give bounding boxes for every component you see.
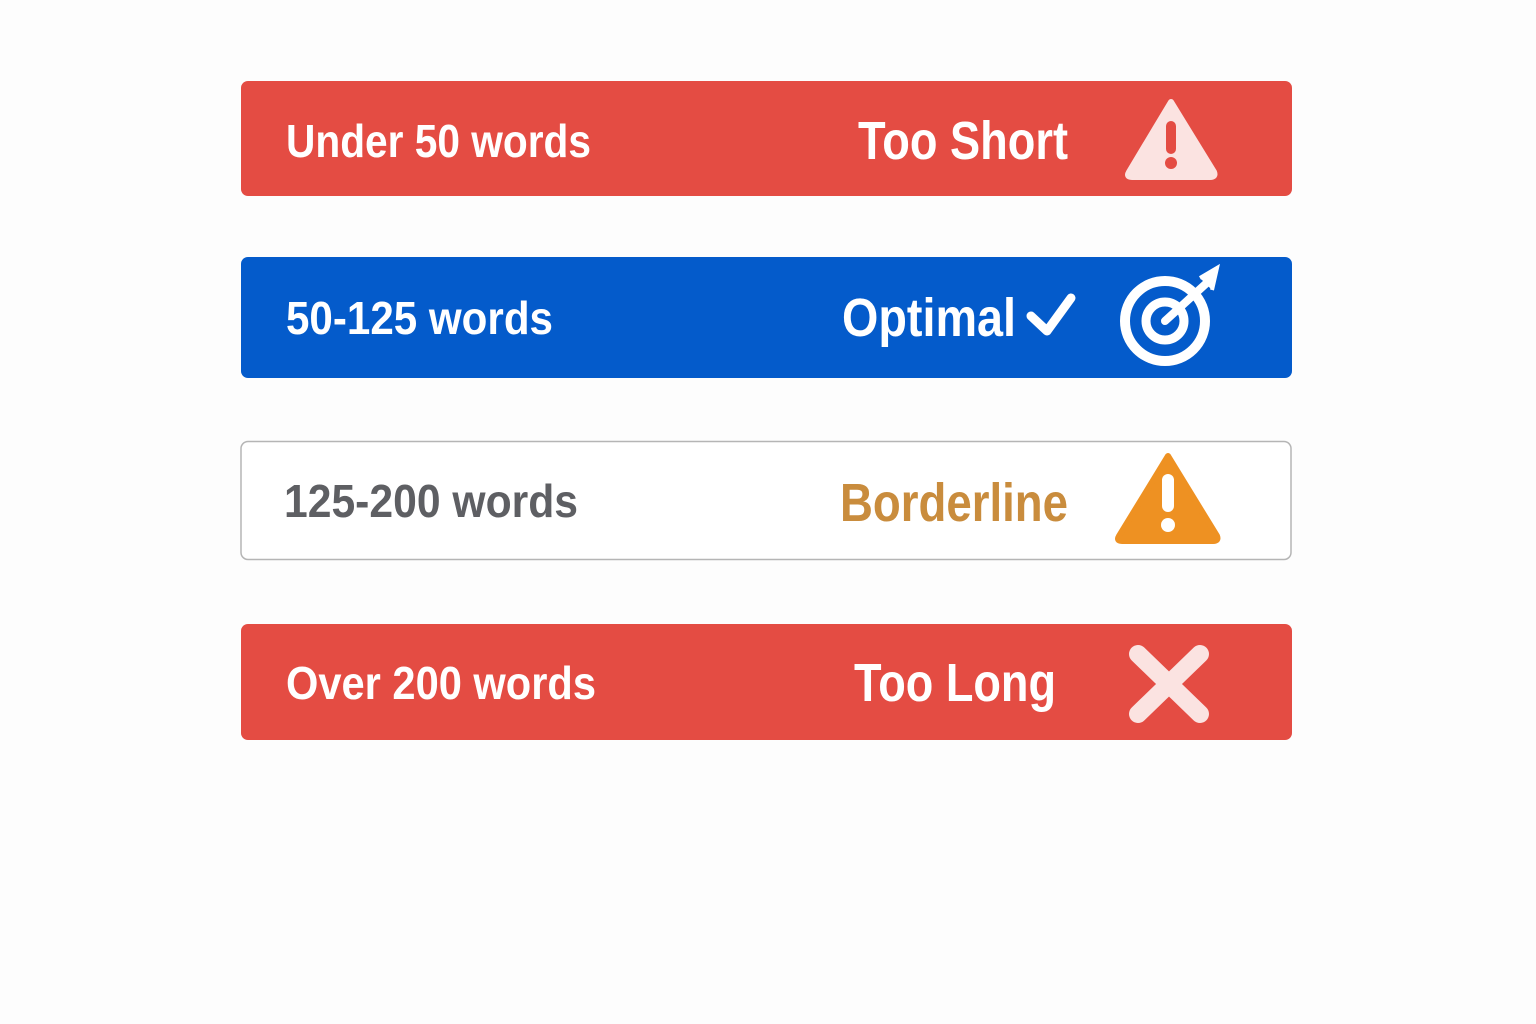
icon: warning triangle light bbox=[1128, 102, 1214, 177]
text: too short: Too Short bbox=[858, 111, 1068, 171]
text: 50-125 words: 50-125 words bbox=[286, 292, 553, 344]
panel: 50-125 words bbox=[241, 257, 1292, 378]
icon: x mark bbox=[1138, 654, 1200, 714]
icon: target with arrow bbox=[1125, 268, 1217, 361]
panel: under 50 words bbox=[241, 81, 1292, 196]
text: optimal: Optimal bbox=[842, 288, 1016, 348]
text: under 50 words: Under 50 words bbox=[286, 115, 591, 167]
text: 125-200 words: 125-200 words bbox=[284, 475, 578, 527]
text: borderline: Borderline bbox=[840, 473, 1068, 533]
icon: orange warning triangle bbox=[1118, 456, 1218, 541]
panel: over 200 words bbox=[241, 624, 1292, 740]
text: too long: Too Long bbox=[854, 653, 1056, 713]
icon: checkmark bbox=[1031, 298, 1071, 331]
text: over 200 words: Over 200 words bbox=[286, 657, 596, 709]
panel: 125-200 words bbox=[241, 442, 1291, 560]
